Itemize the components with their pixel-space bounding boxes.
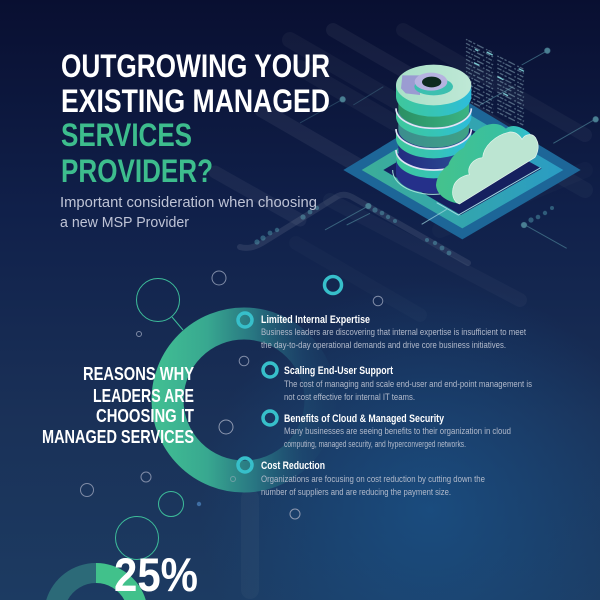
cloud	[436, 124, 537, 204]
disk two	[396, 108, 471, 137]
reason 2	[263, 363, 532, 402]
top disk	[396, 85, 471, 117]
background glow	[200, 280, 600, 600]
dotted data trails	[254, 206, 554, 255]
heading: reasons: CHOOSING IT	[96, 406, 194, 426]
title	[61, 48, 330, 189]
reason 1: Limited Internal Expertise	[261, 314, 370, 326]
data columns	[466, 39, 524, 125]
reason 4	[238, 458, 485, 497]
decorative ring	[168, 324, 320, 476]
reason 1: Business leaders are discovering that internal expertise is insufficient to meet	[261, 327, 526, 337]
heading: reasons	[42, 364, 194, 447]
title: PROVIDER?	[61, 153, 213, 189]
title: OUTGROWING YOUR	[61, 48, 330, 84]
title: SERVICES	[61, 117, 192, 153]
reason 1: the day-to-day operational demands and drive core business initiatives.	[261, 340, 506, 350]
reason 1	[238, 313, 526, 350]
reason 3	[263, 411, 511, 449]
subtitle	[60, 194, 317, 231]
inner teal	[398, 110, 469, 148]
reason 4: number of suppliers and are reducing the payment size.	[261, 487, 451, 497]
reason 3: Benefits of Cloud & Managed Security	[284, 413, 445, 425]
reason 4: Cost Reduction	[261, 460, 325, 472]
statistic: 25%: 25%	[114, 548, 198, 600]
heading: reasons: MANAGED SERVICES	[42, 427, 194, 447]
disk four	[396, 150, 471, 178]
subtitle: Important consideration when choosing	[60, 194, 317, 211]
reason 4: Organizations are focusing on cost reduction by cutting down the	[261, 474, 485, 484]
inner blue	[398, 130, 469, 169]
background diagonal stripes	[215, 30, 585, 590]
subtitle: a new MSP Provider	[60, 214, 189, 231]
heading: reasons: REASONS WHY	[83, 364, 194, 384]
inner green	[398, 90, 469, 127]
reason 3: computing, managed security, and hyperconverged networks.	[284, 439, 466, 449]
disk three	[396, 129, 471, 158]
base disk	[396, 153, 471, 193]
reason 3: Many businesses are seeing benefits to their organization in cloud	[284, 426, 511, 436]
chip base	[343, 98, 581, 239]
illustration: server stack and cloud on isometric chip	[300, 39, 598, 248]
title: EXISTING MANAGED	[61, 83, 330, 119]
connector lines	[300, 48, 598, 248]
reason 2: The cost of managing and scale end-user and end-point management is	[284, 379, 532, 389]
reason 2: Scaling End-User Support	[284, 365, 393, 377]
donut chart: 25%	[46, 563, 146, 600]
reason 2: not cost effective for internal IT teams.	[284, 392, 415, 402]
floating circles	[80, 271, 383, 560]
heading: reasons: LEADERS ARE	[93, 386, 194, 406]
